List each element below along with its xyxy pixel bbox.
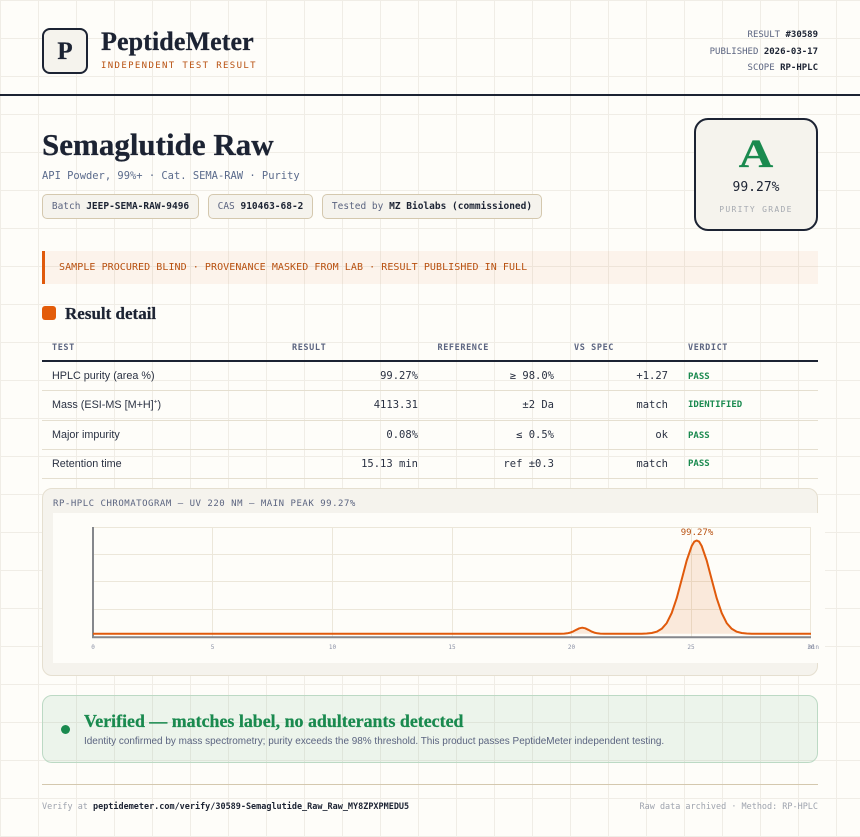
section title: Result detail <box>65 304 156 323</box>
x axis tick labels: 15 <box>448 644 456 651</box>
row: retention time: Retention time <box>52 458 122 470</box>
row: impurity: 0.08% <box>386 429 418 441</box>
row: HPLC purity: PASS <box>688 372 710 382</box>
published date: PUBLISHED 2026-03-17 <box>710 47 818 57</box>
chromatogram trace <box>93 540 811 634</box>
x axis tick labels <box>91 644 819 651</box>
footer rule <box>42 784 818 785</box>
footer verification link: Verify at peptidemeter.com/verify/30589-Semaglutide_Raw_Raw_MY8ZPXPMEDU5 <box>42 801 409 811</box>
table header: REFERENCE <box>438 343 489 353</box>
footer method note: Raw data archived · Method: RP-HPLC <box>640 801 818 811</box>
header <box>0 27 860 96</box>
product title: Semaglutide Raw <box>42 127 274 162</box>
table header: VERDICT <box>688 343 728 353</box>
row: HPLC purity: ≥ 98.0% <box>510 370 554 382</box>
row: mass: ±2 Da <box>522 399 554 411</box>
pill: tested by <box>322 194 542 219</box>
row: retention time: match <box>636 458 668 470</box>
logo badge <box>42 28 88 74</box>
chromatogram title: RP-HPLC CHROMATOGRAM — UV 220 NM — MAIN PEAK 99.27% <box>53 499 356 509</box>
section heading <box>42 304 156 323</box>
row: mass: match <box>636 399 668 411</box>
verdict description: Identity confirmed by mass spectrometry; purity exceeds the 98% threshold. This product passes PeptideMeter independent testing. <box>84 736 664 747</box>
table header <box>42 343 818 362</box>
brand name: PeptideMeter <box>101 27 254 56</box>
x axis tick labels: min <box>808 644 819 651</box>
row: retention time: PASS <box>688 459 710 469</box>
pill: batch <box>42 194 199 219</box>
verdict heading: Verified — matches label, no adulterants detected <box>84 711 463 731</box>
pill: batch: Batch JEEP-SEMA-RAW-9496 <box>52 201 189 212</box>
grade letter: A <box>739 132 773 176</box>
row: HPLC purity <box>42 370 818 391</box>
pill: tested by: Tested by MZ Biolabs (commissioned) <box>332 201 532 212</box>
pill: CAS <box>208 194 313 219</box>
row: HPLC purity: +1.27 <box>636 370 668 382</box>
grade card <box>694 118 818 231</box>
verdict dot <box>60 725 70 734</box>
logo badge: P <box>57 38 73 65</box>
row: retention time: 15.13 min <box>361 458 418 470</box>
x axis tick labels: 25 <box>687 644 695 651</box>
notice text: SAMPLE PROCURED BLIND · PROVENANCE MASKED FROM LAB · RESULT PUBLISHED IN FULL <box>59 262 527 273</box>
result number: RESULT #30589 <box>748 30 818 40</box>
row: mass: IDENTIFIED <box>688 400 742 410</box>
table header: RESULT <box>292 343 326 353</box>
row: HPLC purity: HPLC purity (area %) <box>52 370 155 382</box>
row: impurity <box>42 428 818 450</box>
row: retention time: ref ±0.3 <box>503 458 554 470</box>
section marker <box>42 306 56 320</box>
row: mass <box>42 398 818 421</box>
row: mass: 4113.31 <box>374 399 418 411</box>
chromatogram chart <box>53 513 825 663</box>
row: impurity: Major impurity <box>52 428 120 440</box>
x axis tick labels: 10 <box>329 644 336 651</box>
provenance notice <box>42 251 818 284</box>
axes <box>93 527 811 637</box>
row: mass: Mass (ESI-MS [M+H]+) <box>52 398 161 410</box>
results table <box>42 343 818 479</box>
x axis tick labels: 20 <box>568 644 575 651</box>
chromatogram panel <box>42 488 818 676</box>
row: retention time <box>42 458 818 479</box>
scope: SCOPE RP-HPLC <box>748 63 818 73</box>
x axis tick labels: 30 <box>807 644 815 651</box>
purity value: 99.27% <box>733 180 779 195</box>
row: impurity: ok <box>655 429 668 441</box>
peak label: 99.27% <box>681 528 714 538</box>
grade caption: PURITY GRADE <box>719 205 793 214</box>
verdict panel <box>42 695 818 763</box>
header rule <box>0 94 860 96</box>
table header: TEST <box>52 343 75 353</box>
result metadata <box>710 30 818 73</box>
peak area fill <box>560 540 752 634</box>
x axis tick labels: 0 <box>91 644 95 651</box>
row: impurity: PASS <box>688 431 710 441</box>
pill: CAS: CAS 910463-68-2 <box>218 201 303 212</box>
row: HPLC purity: 99.27% <box>380 370 418 382</box>
product subtitle: API Powder, 99%+ · Cat. SEMA-RAW · Purity <box>42 170 300 182</box>
table header: VS SPEC <box>574 343 614 353</box>
brand tagline: INDEPENDENT TEST RESULT <box>101 61 257 71</box>
row: impurity: ≤ 0.5% <box>516 429 554 441</box>
x axis tick labels: 5 <box>211 644 215 651</box>
